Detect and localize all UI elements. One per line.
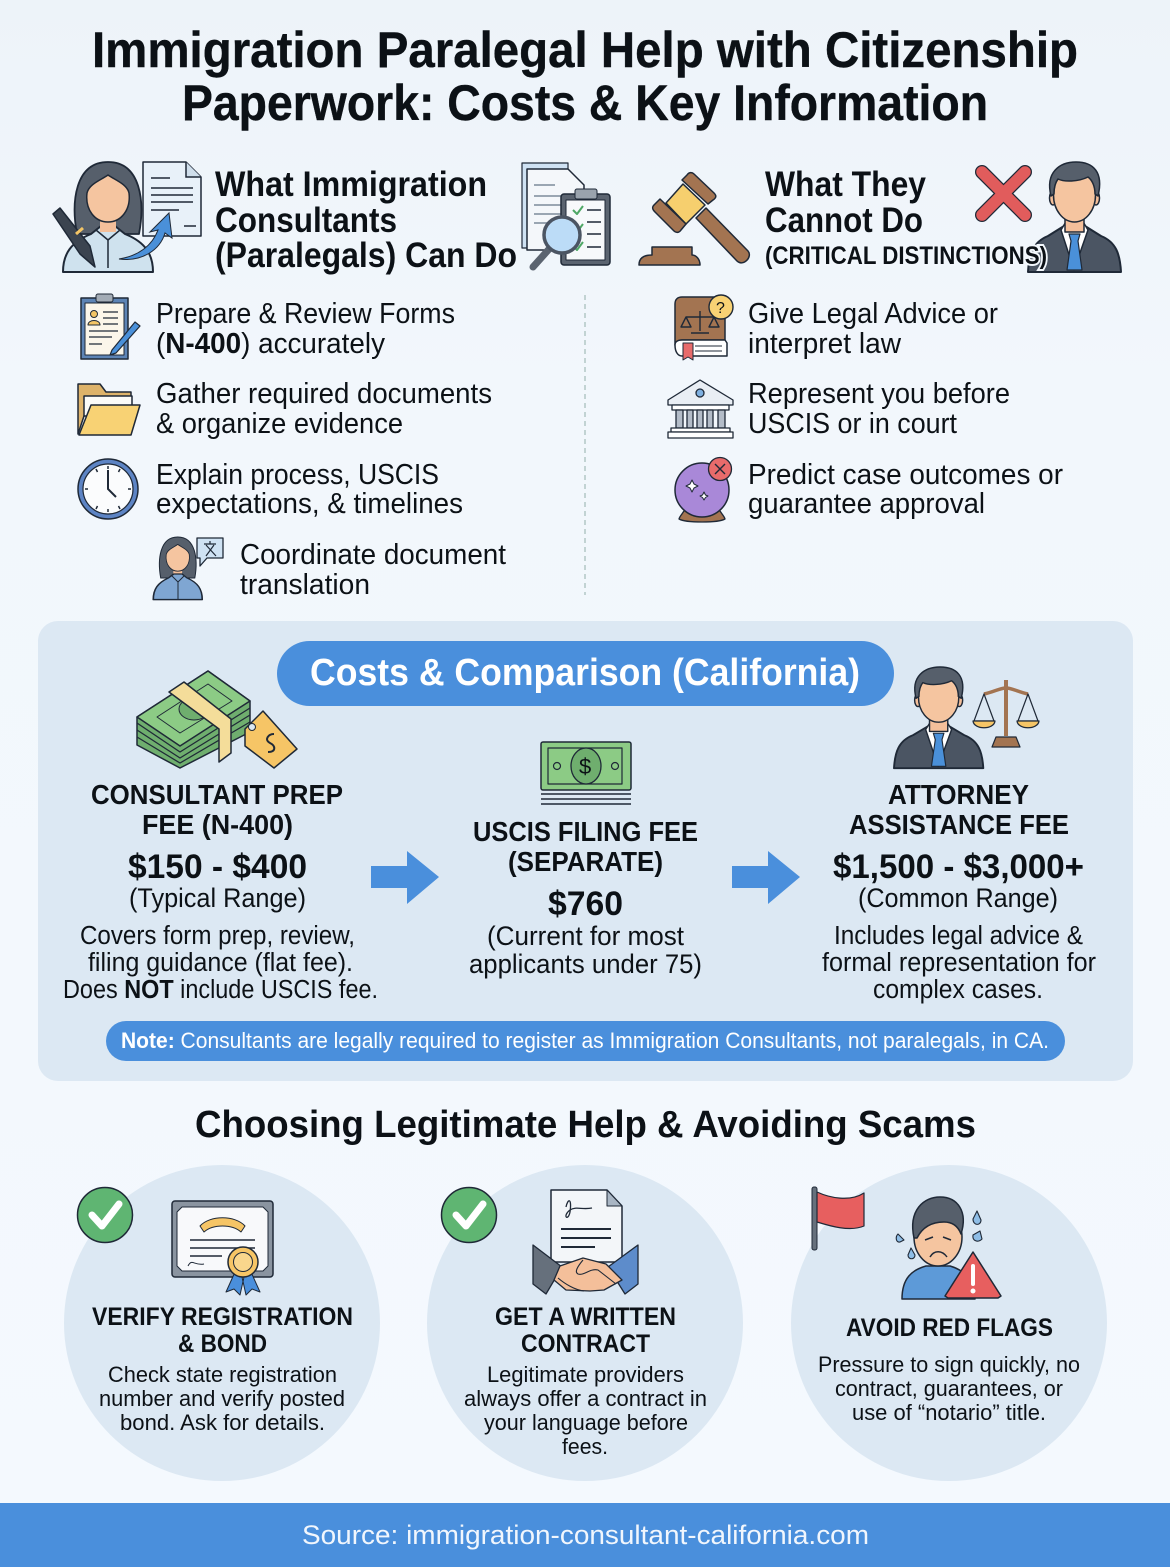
note pill: Note: Consultants are legally required to register as Immigration Consultants, not paralegals, in CA. xyxy=(121,1028,1049,1053)
text: coordinate translation xyxy=(240,539,506,601)
text: red flags description xyxy=(818,1352,1080,1425)
icon: folder xyxy=(78,384,140,435)
text: attorney fee amount: (Common Range) xyxy=(858,883,1058,913)
text: coordinate translation: Coordinate document xyxy=(240,539,506,571)
text: verify registration description: Check state registration xyxy=(108,1362,337,1387)
text: red flags description: Pressure to sign quickly, no xyxy=(818,1352,1080,1377)
icon: certificate with seal xyxy=(172,1201,273,1295)
text: legal advice: Give Legal Advice or xyxy=(748,298,998,330)
card: verify registration xyxy=(64,1165,380,1481)
text: attorney fee label: ATTORNEY xyxy=(888,779,1029,810)
text: attorney fee label: ASSISTANCE FEE xyxy=(849,809,1069,840)
text: red flags heading: AVOID RED FLAGS xyxy=(846,1314,1053,1342)
text: gather documents: Gather required documents xyxy=(156,378,492,410)
text: consultant fee label xyxy=(91,779,343,840)
icon: green check xyxy=(78,1188,132,1242)
title: Immigration Paralegal Help with Citizenship xyxy=(92,22,1078,78)
heading: what they cannot do xyxy=(765,165,926,240)
text: attorney fee description: complex cases. xyxy=(873,976,1043,1004)
title xyxy=(92,22,1078,131)
text: attorney fee description: formal representation for xyxy=(822,949,1096,977)
arrow: consultant to uscis xyxy=(371,851,439,904)
icon: woman consultant with pen and document xyxy=(53,162,201,272)
text: prepare forms: (N-400) accurately xyxy=(156,328,385,360)
text: uscis fee amount: applicants under 75) xyxy=(469,949,702,979)
text: prepare forms xyxy=(156,298,455,360)
heading: what consultants can do xyxy=(215,165,517,275)
text: represent in court: Represent you before xyxy=(748,378,1010,410)
heading: what they cannot do: What They xyxy=(765,165,926,204)
footer: source xyxy=(0,1503,1170,1567)
icon: dollar bill: $ xyxy=(579,754,591,779)
text: legal advice: interpret law xyxy=(748,328,902,360)
heading: what consultants can do: Consultants xyxy=(215,201,397,240)
icon: law book with question bubble: ? xyxy=(716,300,725,317)
text: red flags description: contract, guarantees, or xyxy=(835,1376,1063,1401)
text: uscis fee amount xyxy=(469,885,702,979)
arrow: uscis to attorney xyxy=(732,851,800,904)
item: legal advice xyxy=(675,295,998,360)
icon: attorney with scales xyxy=(894,667,1039,768)
heading: what they cannot do: Cannot Do xyxy=(765,201,923,240)
text: predict outcomes: guarantee approval xyxy=(748,488,985,520)
list: can do items xyxy=(78,294,506,601)
heading: what consultants can do: What Immigration xyxy=(215,165,487,204)
icon: documents, clipboard and magnifier xyxy=(522,163,610,267)
text: consultant fee description: filing guidance (flat fee). xyxy=(88,949,353,977)
text: consultant fee amount: $150 - $400 xyxy=(128,848,307,886)
text: explain process: Explain process, USCIS xyxy=(156,459,439,491)
icon: crystal ball xyxy=(675,458,732,522)
heading pill: costs and comparison: Costs & Comparison (California) xyxy=(310,652,860,694)
icon: dollar bill xyxy=(541,742,631,804)
icon: courthouse xyxy=(668,380,733,438)
text: contract description: your language before xyxy=(484,1410,688,1435)
text: coordinate translation: translation xyxy=(240,569,370,601)
icon: red x xyxy=(982,172,1025,215)
text: uscis fee label xyxy=(473,816,698,877)
text: contract heading: GET A WRITTEN xyxy=(495,1303,676,1331)
text: contract heading xyxy=(495,1303,676,1358)
icon: contract and handshake xyxy=(533,1190,638,1294)
text: explain process: expectations, & timelines xyxy=(156,488,463,520)
text: represent in court xyxy=(748,378,1010,440)
item: predict outcomes xyxy=(675,458,1063,522)
list: cannot do items xyxy=(668,295,1063,522)
text: attorney fee amount: $1,500 - $3,000+ xyxy=(833,848,1084,886)
column: uscis filing fee xyxy=(469,742,702,979)
icon: clock xyxy=(78,459,138,519)
icon: gavel xyxy=(639,173,749,265)
icon: translator with speech bubble xyxy=(153,537,223,600)
heading: choosing legitimate help: Choosing Legitimate Help & Avoiding Scams xyxy=(195,1104,976,1146)
text: consultant fee description: Covers form prep, review, xyxy=(80,922,355,950)
text: attorney fee label xyxy=(849,779,1069,840)
text: contract description: Legitimate providers xyxy=(487,1362,684,1387)
text: verify registration description xyxy=(99,1362,345,1435)
text: consultant fee label: FEE (N-400) xyxy=(142,809,293,840)
text: uscis fee amount: $760 xyxy=(548,885,623,923)
item: prepare forms xyxy=(81,294,455,360)
text: red flags description: use of “notario” title. xyxy=(852,1400,1046,1425)
subheading: critical distinctions: (CRITICAL DISTINCTIONS) xyxy=(765,242,1047,270)
item: explain process xyxy=(78,459,463,520)
text: consultant fee amount xyxy=(128,848,307,913)
item: coordinate translation xyxy=(153,537,506,601)
title: Paperwork: Costs & Key Information xyxy=(182,75,988,131)
text: predict outcomes: Predict case outcomes or xyxy=(748,459,1063,491)
text: consultant fee description xyxy=(63,922,378,1004)
item: represent in court xyxy=(668,378,1010,440)
text: consultant fee description: Does NOT include USCIS fee. xyxy=(63,976,378,1004)
text: verify registration heading: & BOND xyxy=(178,1330,267,1358)
text: verify registration heading: VERIFY REGISTRATION xyxy=(92,1303,353,1331)
text: attorney fee description xyxy=(822,922,1096,1004)
panel: costs and comparison xyxy=(38,621,1133,1081)
text: attorney fee description: Includes legal advice & xyxy=(834,922,1083,950)
text: uscis fee amount: (Current for most xyxy=(487,921,684,951)
text: predict outcomes xyxy=(748,459,1063,520)
text: attorney fee amount xyxy=(833,848,1084,913)
text: prepare forms: Prepare & Review Forms xyxy=(156,298,455,330)
text: consultant fee label: CONSULTANT PREP xyxy=(91,779,343,810)
text: uscis fee label: USCIS FILING FEE xyxy=(473,816,698,847)
footer: source: Source: immigration-consultant-california.com xyxy=(302,1520,869,1550)
text: explain process xyxy=(156,459,463,520)
text: contract description: fees. xyxy=(562,1434,608,1459)
heading: what consultants can do: (Paralegals) Can Do xyxy=(215,236,517,275)
icon: money stack with price tag xyxy=(137,671,297,768)
panel: what consultants can do xyxy=(53,162,610,601)
column: attorney assistance fee xyxy=(822,667,1096,1004)
text: gather documents xyxy=(156,378,492,440)
text: consultant fee amount: (Typical Range) xyxy=(129,883,306,913)
text: legal advice xyxy=(748,298,998,360)
text: represent in court: USCIS or in court xyxy=(748,408,957,440)
icon: law book with question bubble xyxy=(675,295,733,360)
text: verify registration heading xyxy=(92,1303,353,1358)
icon: clipboard with pen xyxy=(81,294,140,359)
text: verify registration description: bond. Ask for details. xyxy=(120,1410,325,1435)
text: contract description: always offer a contract in xyxy=(464,1386,707,1411)
icon: man in suit xyxy=(1028,162,1121,272)
note pill xyxy=(106,1021,1065,1061)
panel: what they cannot do xyxy=(639,162,1121,522)
text: uscis fee label: (SEPARATE) xyxy=(508,846,663,877)
heading pill: costs and comparison xyxy=(277,641,894,706)
card: avoid red flags xyxy=(791,1165,1107,1481)
icon: worried person with warning xyxy=(896,1197,1001,1299)
column: consultant prep fee xyxy=(63,671,378,1004)
icon: red flag xyxy=(812,1187,864,1250)
icon: green check xyxy=(442,1188,496,1242)
text: contract heading: CONTRACT xyxy=(521,1330,650,1358)
item: gather documents xyxy=(78,378,492,440)
text: verify registration description: number and verify posted xyxy=(99,1386,345,1411)
text: contract description xyxy=(464,1362,707,1459)
text: gather documents: & organize evidence xyxy=(156,408,403,440)
card: written contract xyxy=(427,1165,743,1481)
